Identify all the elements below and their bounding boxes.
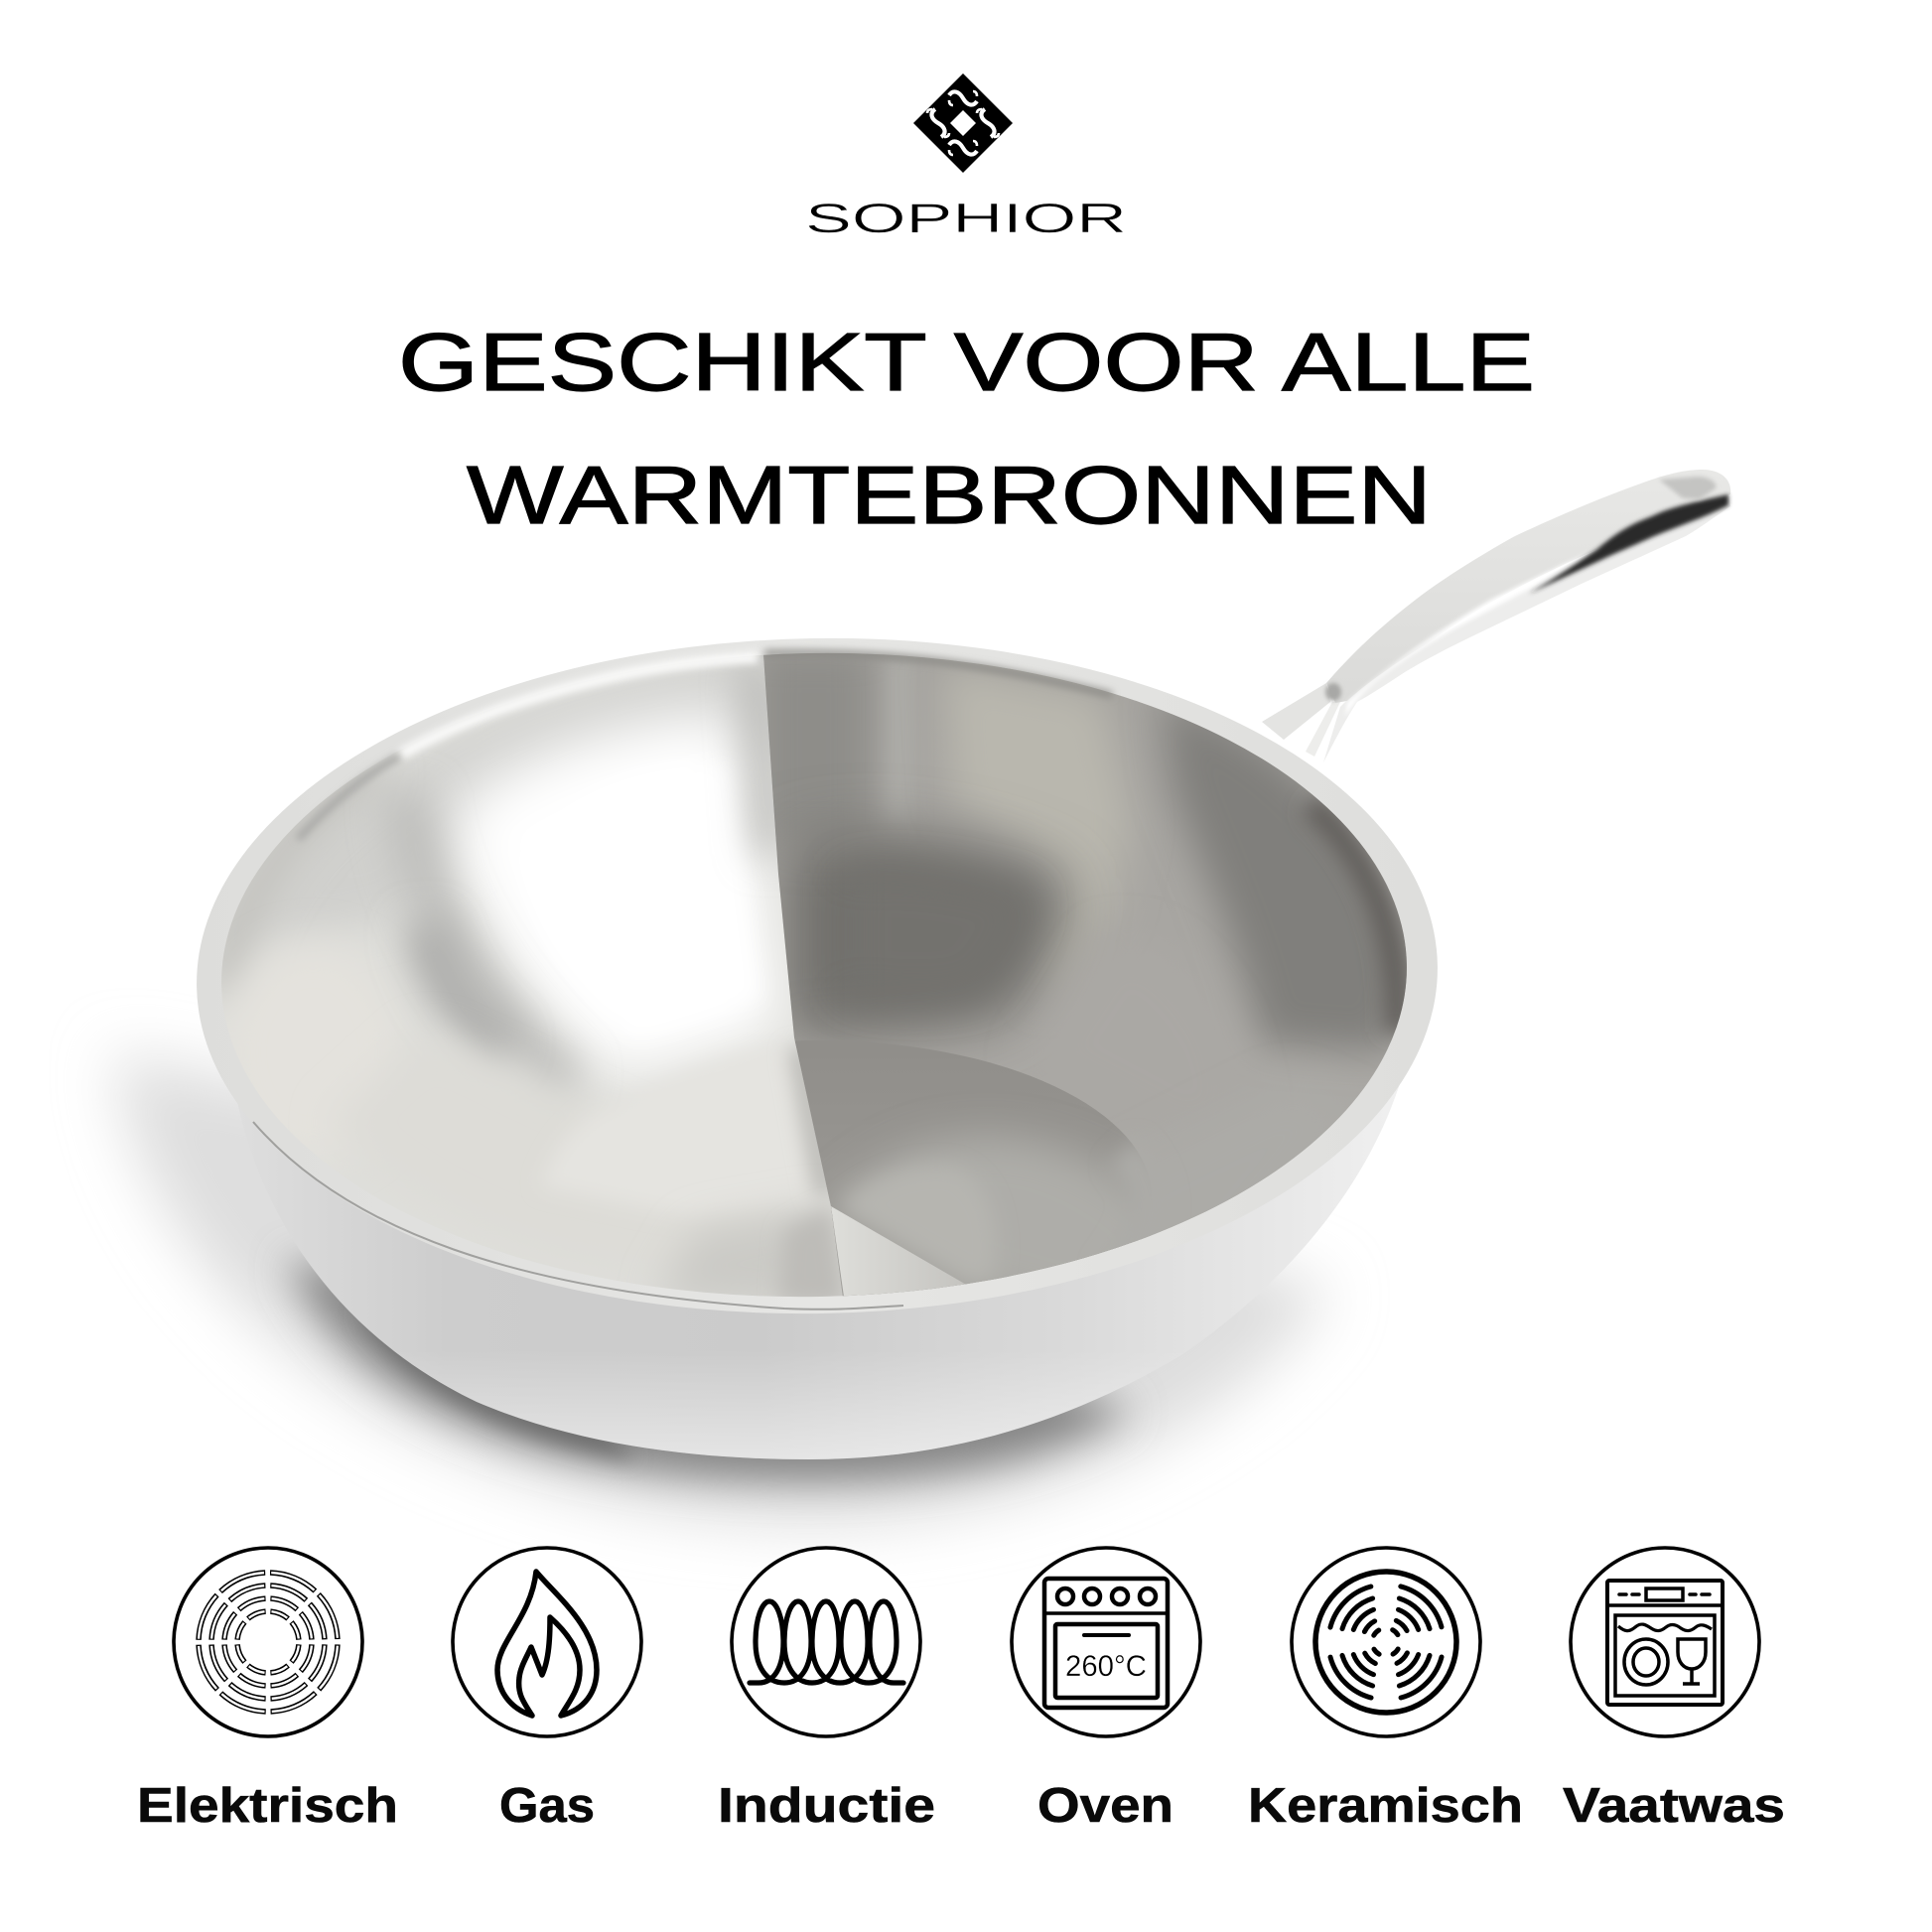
left base area [564,1125,757,1204]
label: elektrisch: Elektrisch [137,1779,398,1833]
left edge shading [224,764,377,993]
handle upper prong [1262,683,1330,740]
pan handle [1262,470,1730,762]
handle lower prong [1306,702,1340,757]
white highlight [447,710,784,1077]
icon: gas flame [453,1548,641,1736]
near-centre lower-right light [846,1174,985,1275]
base seam shade [799,1047,826,1196]
lower-left wall [461,1040,503,1070]
body lower glow [236,993,1402,1459]
left wall light zone [242,973,272,999]
lower-left base sector [669,1205,804,1297]
pan interior bowl [221,653,1407,1297]
icon: vaatwas [1571,1548,1759,1736]
handle main stem [1326,470,1730,703]
pan shadow [114,1052,1330,1524]
label: gas: Gas [499,1779,595,1833]
title: GESCHIKT VOOR ALLE [398,316,1535,408]
label: inductie: Inductie [718,1779,935,1833]
central dark blob [784,833,1066,1037]
ornament small arcs [927,91,999,155]
icon: oven [1012,1548,1200,1736]
ornament [931,91,995,155]
pan rim [191,627,1444,1324]
base disc [794,1040,1138,1297]
right edge darkest [1311,804,1398,1033]
title [398,316,1535,541]
brand name: SOPHIOR [805,195,1127,241]
bright base wedge [831,1206,965,1297]
center diamond [950,110,976,136]
top rim highlight [401,657,758,755]
soften disc lower-right edge [1115,1142,1152,1207]
label: oven: Oven [1037,1779,1173,1833]
icon: inductie coil [732,1548,920,1736]
icon: elektrisch [174,1548,362,1736]
rim details [253,653,1112,1310]
upper-right dark wall [1162,695,1410,1052]
top-right rim dark edge [764,653,1112,695]
seam shadow left [757,665,769,854]
infographic canvas [105,73,1783,1823]
pan body [236,993,1402,1459]
title: WARMTEBRONNEN [467,449,1432,541]
icon: keramisch [1292,1548,1480,1736]
icon: oven: 260°C [1065,1650,1147,1683]
label: keramisch: Keramisch [1248,1779,1523,1833]
right half of bowl [763,653,1407,1297]
label: vaatwas: Vaatwas [1563,1779,1785,1833]
mid light zone [1023,937,1251,1152]
top wall dark [755,645,874,844]
handle lower highlight [1345,549,1597,717]
handle lower rail [1323,494,1730,762]
handle tip hole [1659,477,1716,499]
lower-left rim groove [253,1122,903,1310]
vertical light stripe [890,665,905,806]
handle rivet opening [1325,683,1341,701]
diamond mark [913,73,1013,173]
brand logo [805,73,1127,241]
base lower-right sector [852,1128,1129,1279]
warm light band [941,671,1132,955]
upper-left wall band [274,668,751,931]
dark curved band [407,794,571,1087]
handle dark reflection [1529,494,1728,594]
top-left rim dark wedge [298,757,399,839]
lower right wall [1153,1130,1327,1235]
